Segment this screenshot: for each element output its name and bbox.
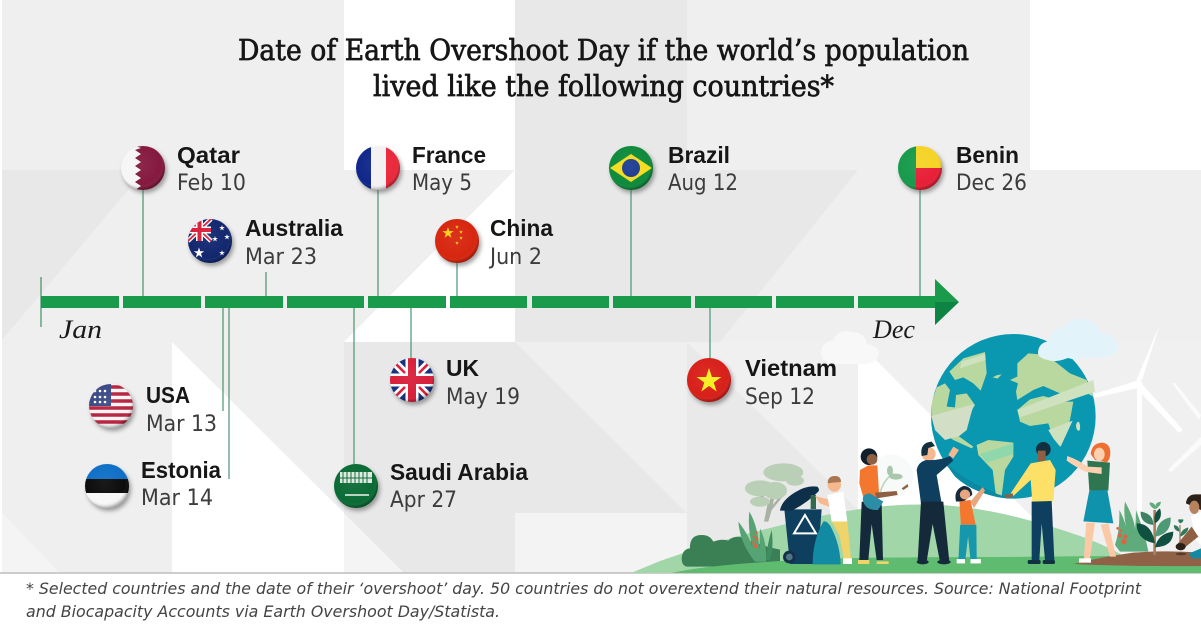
scene: yellow man, woman, garden	[1004, 442, 1201, 566]
name: USA	[146, 382, 190, 408]
person: woman in green	[1067, 443, 1116, 563]
icon: Brazil flag	[609, 146, 655, 193]
name: Estonia	[141, 457, 221, 483]
icon: Vietnam flag	[687, 358, 733, 405]
scene: bushes and plant	[682, 512, 780, 567]
scene: tree, bin, boy, woman and man	[745, 442, 959, 564]
name: Benin	[956, 142, 1019, 168]
globe	[931, 334, 1096, 499]
date: Feb 10	[177, 171, 246, 196]
date: Mar 13	[146, 412, 217, 437]
illustration: people holding the globe	[631, 319, 1201, 573]
person: man in navy	[917, 442, 959, 564]
title: lived like the following countries*	[373, 69, 834, 103]
date: Aug 12	[668, 171, 738, 196]
south America	[977, 440, 1013, 496]
date: May 19	[446, 385, 520, 410]
Africa	[1017, 396, 1073, 447]
arrow head	[935, 279, 959, 325]
background tree	[745, 463, 804, 522]
icon: UK flag	[390, 358, 436, 405]
date: Dec 26	[956, 171, 1027, 196]
name: Vietnam	[745, 355, 837, 381]
icon: Benin flag	[898, 146, 944, 193]
hill	[631, 504, 1130, 573]
date: Sep 12	[745, 385, 815, 410]
marker: China	[435, 215, 553, 296]
blue cloud	[1038, 319, 1118, 361]
ground	[672, 555, 1201, 573]
date: Mar 23	[245, 245, 317, 270]
person: man in yellow	[1004, 442, 1056, 564]
person: boy	[815, 476, 852, 564]
marker: Benin	[898, 142, 1027, 296]
person: woman with plant	[858, 448, 913, 564]
soil	[1073, 551, 1201, 566]
icon: Qatar flag	[121, 146, 167, 193]
name: Qatar	[177, 142, 240, 168]
icon: Saudi Arabia flag	[334, 464, 380, 511]
person: girl	[955, 486, 985, 563]
north America	[949, 352, 987, 391]
name: UK	[446, 355, 479, 381]
footnote	[26, 579, 1142, 621]
footnote: and Biocapacity Accounts via Earth Overshoot Day/Statista.	[26, 602, 500, 621]
date: Apr 27	[390, 488, 457, 513]
marker: Qatar	[121, 142, 246, 296]
marker: Estonia	[85, 308, 229, 511]
name: Brazil	[668, 142, 730, 168]
footnote: * Selected countries and the date of their ‘overshoot’ day. 50 countries do not overextend their natural resources. Source: National Footprint	[26, 579, 1142, 598]
December label: Dec	[872, 315, 915, 344]
date: Jun 2	[488, 245, 542, 270]
Eurasia	[1010, 353, 1093, 400]
icon: China flag	[435, 219, 481, 266]
date: May 5	[412, 171, 472, 196]
name: Australia	[245, 215, 343, 241]
timeline start tick	[40, 277, 42, 327]
date: Mar 14	[141, 486, 213, 511]
title: Date of Earth Overshoot Day if the world’s population	[238, 33, 969, 67]
marker: France	[356, 142, 486, 296]
timeline	[41, 277, 959, 344]
icon: USA flag	[89, 384, 135, 431]
wind turbine	[1094, 324, 1201, 540]
icon: France flag	[356, 146, 402, 193]
marker: UK	[390, 308, 520, 410]
marker: Brazil	[609, 142, 738, 296]
recycling bin	[780, 486, 841, 564]
person: gardener	[1176, 494, 1201, 558]
white cloud	[821, 331, 879, 364]
marker: Saudi Arabia	[334, 308, 528, 513]
January label: Jan	[59, 315, 102, 344]
title	[238, 33, 969, 103]
name: France	[412, 142, 486, 168]
marker: Australia	[188, 215, 343, 296]
month segments	[41, 296, 936, 308]
name: China	[490, 215, 553, 241]
icon: Estonia flag	[85, 464, 131, 511]
name: Saudi Arabia	[390, 459, 528, 485]
marker: Vietnam	[687, 308, 837, 410]
icon: Australia flag	[188, 219, 234, 266]
garden plants	[1115, 502, 1188, 555]
marker: USA	[89, 308, 223, 437]
